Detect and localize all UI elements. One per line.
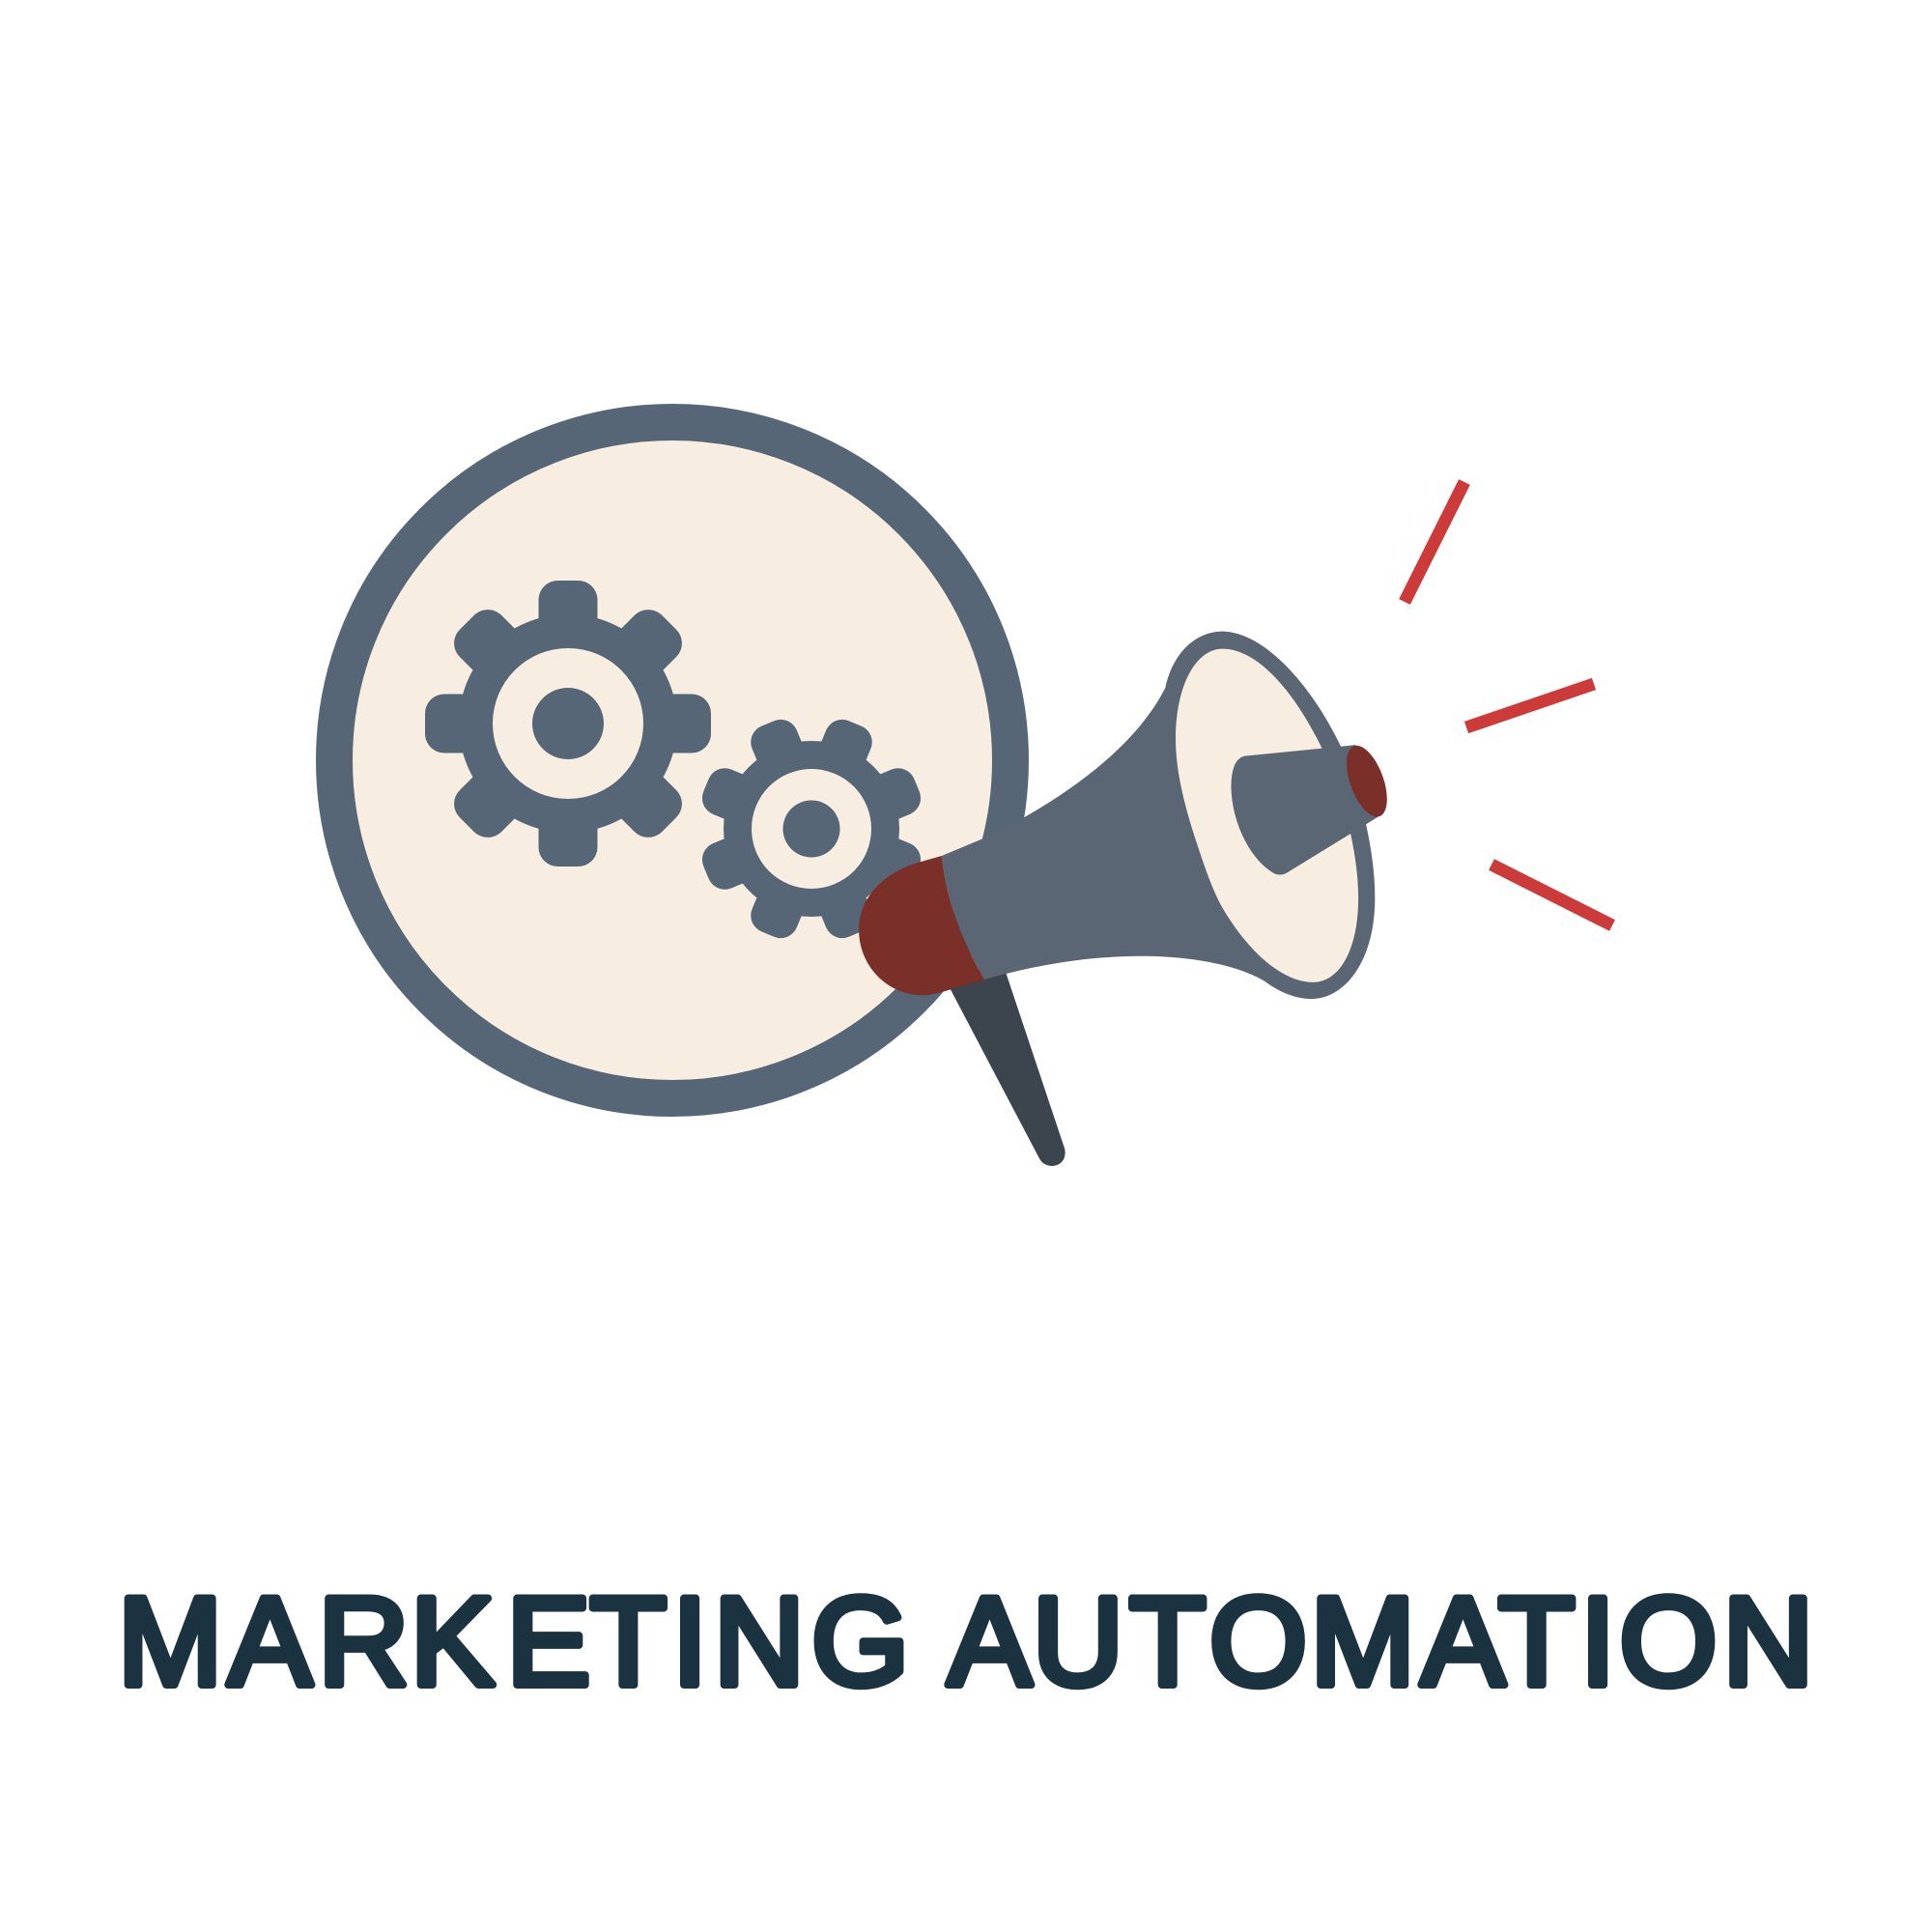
mouthpiece <box>1231 745 1378 874</box>
horn opening <box>1176 649 1358 982</box>
mouthpiece end cap <box>1339 740 1395 822</box>
sound line bottom <box>1492 865 1612 925</box>
icon: small gear <box>696 714 926 944</box>
title: MARKETING AUTOMATION <box>118 1571 1813 1712</box>
megaphone horn <box>942 632 1375 999</box>
rear cap <box>859 856 984 995</box>
icon: large gear <box>425 581 711 867</box>
megaphone handle <box>946 963 1065 1166</box>
icon: megaphone <box>859 632 1395 1166</box>
circle badge <box>334 422 1010 1098</box>
sound lines <box>1405 482 1612 925</box>
sound line top <box>1405 482 1464 602</box>
sound line middle <box>1466 684 1594 727</box>
